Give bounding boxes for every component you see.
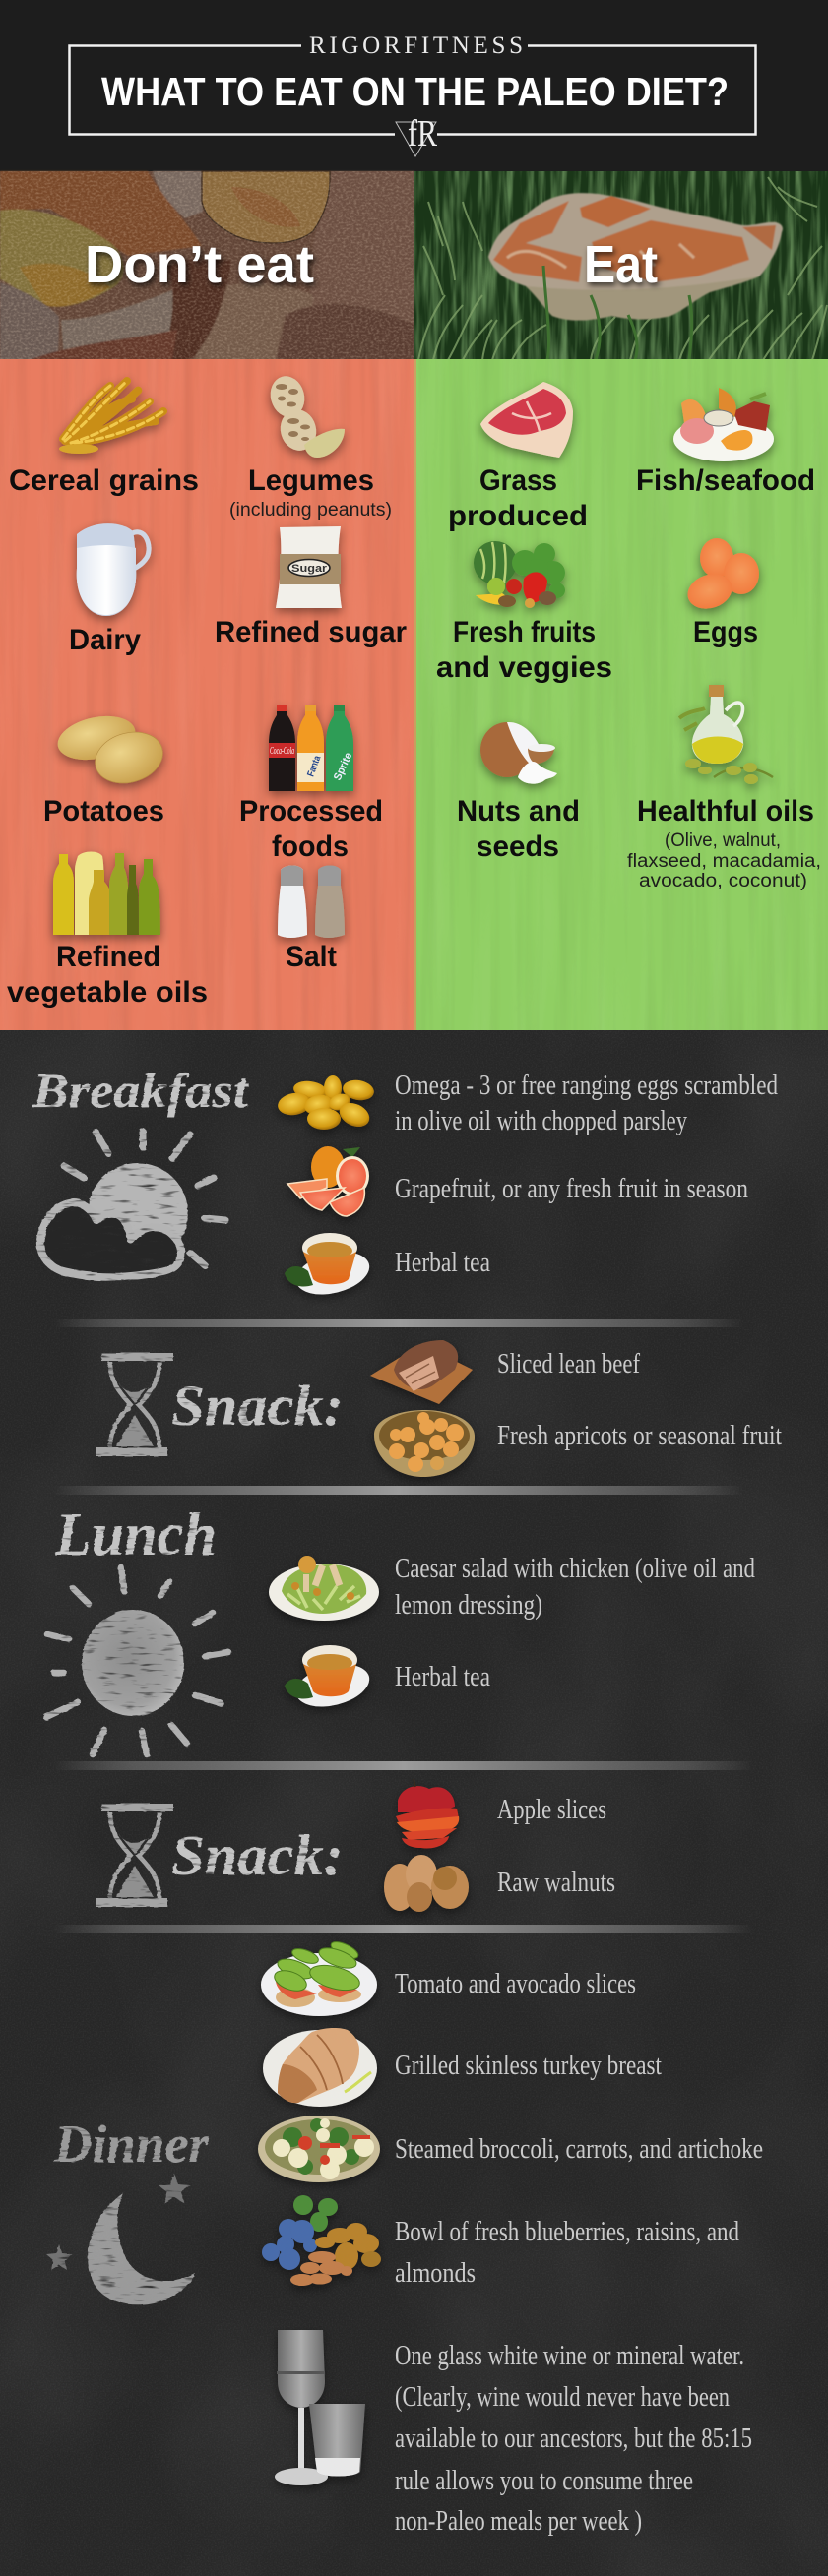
label: nuts and seeds: seeds (477, 830, 559, 863)
icon: sliced apple (396, 1779, 459, 1848)
text: wine note: rule allows you to consume three (395, 2465, 693, 2496)
icon: coconut (480, 722, 557, 784)
hero: eat (414, 171, 828, 360)
text: caesar salad: lemon dressing) (395, 1589, 542, 1621)
label: nuts and seeds (457, 795, 580, 863)
icon: soda bottles: Sprite (332, 751, 354, 782)
heading: breakfast: Breakfast (32, 1063, 250, 1118)
heading: dinner: Dinner (53, 2115, 210, 2174)
icon: sun behind cloud (40, 1132, 225, 1277)
note: oil types (627, 830, 821, 891)
label: legumes: Legumes (248, 464, 374, 497)
icon: steamed vegetables (258, 2116, 380, 2182)
icon: seafood plate (673, 388, 774, 461)
text: blueberries, raisins, almonds: almonds (395, 2257, 476, 2289)
icon: potatoes (54, 709, 169, 791)
text: wine note: (Clearly, wine would never have been (395, 2381, 730, 2413)
icon: wheat (59, 381, 163, 454)
icon: steak (480, 382, 573, 458)
label: fresh fruits and veggies: Fresh fruits (453, 616, 596, 648)
main title: WHAT TO EAT ON THE PALEO DIET? (101, 69, 729, 114)
label: dairy: Dairy (69, 624, 141, 656)
text: wine note: non-Paleo meals per week ) (395, 2505, 642, 2537)
icon: berries, raisins and almonds (262, 2195, 381, 2286)
icon: grapefruit (287, 1146, 369, 1216)
divider 3 (54, 1761, 753, 1770)
title frame (69, 45, 756, 134)
divider 1 (54, 1319, 743, 1327)
label: processed foods: Processed (239, 795, 383, 828)
label: refined vegetable oils: vegetable oils (7, 976, 208, 1009)
label: fresh fruits and veggies (436, 616, 612, 684)
text: blueberries, raisins, almonds: Bowl of fresh blueberries, raisins, and (395, 2216, 739, 2247)
label: refined vegetable oils (7, 941, 208, 1009)
heading: snack: Snack: (171, 1374, 344, 1438)
text: tomato and avocado: Tomato and avocado slices (395, 1968, 636, 1999)
label: refined vegetable oils: Refined (56, 941, 160, 973)
icon: sliced beef on board (370, 1340, 473, 1404)
label: grass produced: Grass (479, 464, 557, 497)
icon: oil jug and olives (679, 685, 773, 784)
icon: moon and stars (46, 2174, 195, 2304)
panel: don't eat foods (0, 359, 414, 1030)
icon: herbal tea (285, 1645, 374, 1714)
heading: eat: Eat (584, 235, 658, 294)
note: oil types: avocado, coconut) (639, 871, 807, 891)
label: nuts and seeds: Nuts and (457, 795, 580, 828)
text: blueberries, raisins, almonds (395, 2216, 739, 2289)
text: raw walnuts: Raw walnuts (497, 1867, 615, 1898)
icon: fish oil capsules (276, 1075, 375, 1132)
label: salt: Salt (286, 941, 337, 973)
icon: herbal tea (285, 1233, 374, 1302)
divider 2 (54, 1486, 743, 1495)
label: refined sugar: Refined sugar (215, 616, 407, 648)
label: cereal grains: Cereal grains (9, 464, 199, 497)
text: wine note: One glass white wine or mineral water. (395, 2340, 744, 2371)
heading: don't eat: Don’t eat (85, 235, 314, 294)
label: processed foods (239, 795, 383, 863)
icon: hourglass (96, 1353, 173, 1456)
icon: peanut (266, 372, 345, 458)
label: grass produced (448, 464, 588, 532)
text: caesar salad (395, 1553, 755, 1621)
meat on grass (488, 193, 783, 321)
icon: salt and pepper (278, 866, 345, 938)
icon: soda bottles (269, 705, 354, 791)
icon: turkey plate (263, 2028, 377, 2107)
text: omega eggs (395, 1070, 778, 1136)
icon: avocado plate (261, 1938, 377, 2016)
text: herbal tea: Herbal tea (395, 1247, 490, 1278)
text: turkey breast: Grilled skinless turkey breast (395, 2050, 662, 2081)
heading: lunch: Lunch (54, 1502, 217, 1568)
icon: wine and water glasses (275, 2330, 365, 2485)
brand name: RIGORFITNESS (309, 32, 523, 59)
text: sliced beef: Sliced lean beef (497, 1348, 640, 1380)
text: wine note (395, 2340, 752, 2537)
logo: fR (408, 113, 438, 154)
label: healthful oils: Healthful oils (637, 795, 814, 828)
icon: hourglass (96, 1804, 173, 1907)
icon: milk jug (77, 523, 149, 616)
panel: eat foods (414, 359, 828, 1030)
label: eggs: Eggs (693, 616, 758, 648)
note: oil types: (Olive, walnut, (665, 830, 781, 851)
label: potatoes: Potatoes (43, 795, 164, 828)
label: processed foods: foods (272, 830, 349, 863)
icon: fruits and vegetables (474, 541, 565, 608)
text: grapefruit: Grapefruit, or any fresh fruit in season (395, 1173, 748, 1204)
icon: walnuts (384, 1855, 469, 1912)
icon: vegetable oil bottles (53, 852, 160, 935)
icon: bowl of apricots (374, 1410, 475, 1477)
icon: sun (46, 1567, 228, 1754)
divider 4 (54, 1925, 753, 1933)
icon: caesar salad (269, 1556, 379, 1621)
header band (0, 0, 828, 172)
label: fresh fruits and veggies: and veggies (436, 651, 612, 684)
icon: eggs (683, 538, 759, 614)
heading: snack: Snack: (171, 1823, 344, 1887)
text: herbal tea: Herbal tea (395, 1661, 490, 1692)
text: omega eggs: in olive oil with chopped parsley (395, 1105, 687, 1136)
panel: chalkboard background (0, 1030, 828, 2576)
icon: soda bottles: Fanta (305, 754, 323, 778)
icon: soda bottles: Coca-Cola (270, 746, 294, 757)
note: oil types: flaxseed, macadamia, (627, 851, 821, 872)
logo (396, 113, 438, 156)
icon: sugar bag (276, 526, 342, 608)
hero: don't eat (0, 171, 414, 360)
icon: sugar bag: Sugar (291, 563, 328, 575)
label: fish and seafood: Fish/seafood (636, 464, 815, 497)
label: grass produced: produced (448, 500, 588, 532)
note: including peanuts: (including peanuts) (229, 500, 392, 521)
text: apple slices: Apple slices (497, 1794, 606, 1825)
